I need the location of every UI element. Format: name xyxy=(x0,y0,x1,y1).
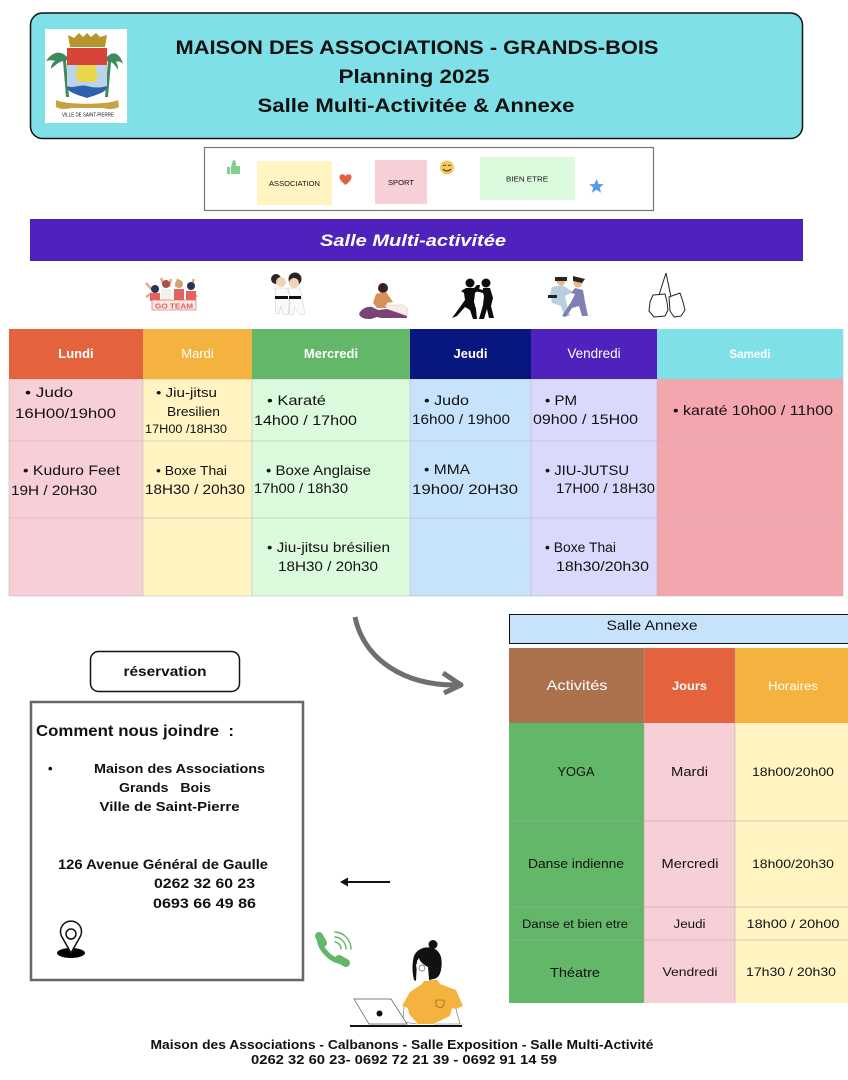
Mercredi sessions: • Jiu-jitsu brésilien xyxy=(267,540,390,555)
Mardi sessions: 18H30 / 20h30 xyxy=(145,481,245,497)
legend: association: ASSOCIATION xyxy=(269,179,320,188)
annex row: danse et bien etre: Danse et bien etre xyxy=(522,919,628,931)
icon: smiley xyxy=(440,160,454,174)
icon: green phone xyxy=(319,932,351,963)
annex row: danse indienne xyxy=(528,856,834,871)
section heading: Salle Annexe xyxy=(510,614,848,644)
Vendredi sessions: 17H00 / 18H30 xyxy=(556,481,655,496)
header: Vendredi: Vendredi xyxy=(567,346,621,361)
header: Mardi: Mardi xyxy=(181,346,214,361)
contact address: Ville de Saint-Pierre xyxy=(100,799,240,814)
annex row: yoga: YOGA xyxy=(558,765,595,779)
arrow: left to contact panel xyxy=(340,878,390,886)
Jeudi sessions: 16h00 / 19h00 xyxy=(412,412,510,427)
annex column headers: Activités xyxy=(546,677,608,693)
contact address: Grands Bois xyxy=(119,780,211,795)
Vendredi sessions: • PM xyxy=(545,393,577,408)
Mercredi sessions: • Karaté xyxy=(267,392,326,408)
woman body xyxy=(402,980,463,1024)
icon: judo pair xyxy=(271,272,305,315)
Lundi sessions: 19H / 20H30 xyxy=(11,482,97,498)
Mercredi sessions: 14h00 / 17h00 xyxy=(254,412,357,428)
Jeudi sessions: • Judo xyxy=(424,393,469,408)
legend: association xyxy=(257,161,332,205)
Samedi session: • karaté 10h00 / 11h00 xyxy=(673,402,833,418)
Mercredi sessions: • Boxe Anglaise xyxy=(266,463,371,478)
annex column headers xyxy=(509,648,848,723)
icon: boxing gloves xyxy=(649,273,685,317)
logo: coat of arms of Saint-Pierre xyxy=(45,29,127,123)
header banner xyxy=(30,13,802,138)
table column backgrounds xyxy=(9,329,843,596)
title lines xyxy=(176,37,658,117)
Mardi sessions: 17H00 /18H30 xyxy=(145,424,227,436)
Mercredi sessions xyxy=(254,392,390,574)
icon: heart xyxy=(340,174,352,185)
annex row: yoga: Mardi xyxy=(671,764,708,779)
Jeudi sessions: • MMA xyxy=(424,461,471,477)
icon: thumbs up xyxy=(227,160,240,174)
footer contact xyxy=(150,1037,654,1067)
icon: jiu-jitsu pair xyxy=(548,276,588,317)
legend: bien etre xyxy=(480,157,575,200)
annex table xyxy=(509,648,848,1003)
annex column headers: Horaires xyxy=(768,681,818,693)
legend: sport: SPORT xyxy=(388,178,414,187)
Lundi sessions: 16H00/19h00 xyxy=(15,405,116,421)
Jeudi sessions xyxy=(412,393,518,497)
annex row: yoga xyxy=(558,764,834,779)
contact address: Maison des Associations xyxy=(94,761,265,776)
reservation button xyxy=(90,652,240,692)
header: Jeudi: Jeudi xyxy=(454,346,487,361)
annex row: danse indienne: 18h00/20h30 xyxy=(752,857,834,871)
Mercredi sessions: 18H30 / 20h30 xyxy=(278,559,378,574)
illustration: woman at laptop xyxy=(350,940,463,1027)
logo caption: VILLE DE SAINT-PIERRE xyxy=(62,112,114,118)
Mardi sessions: • Boxe Thai xyxy=(156,463,227,478)
Vendredi sessions: 18h30/20h30 xyxy=(556,559,649,574)
contact address: 126 Avenue Général de Gaulle xyxy=(58,857,269,872)
activity illustrations xyxy=(146,272,685,319)
laptop xyxy=(354,999,407,1024)
header: Jeudi xyxy=(410,329,531,379)
footer contact: 0262 32 60 23- 0692 72 21 39 - 0692 91 14 59 xyxy=(251,1052,557,1067)
arrow: curved to annex xyxy=(355,617,461,693)
section heading: Salle Multi-activitée xyxy=(30,219,803,261)
title lines: Planning 2025 xyxy=(338,66,490,88)
legend box xyxy=(204,148,654,210)
icon: go team group: GO TEAM xyxy=(155,302,193,310)
annex cell backgrounds xyxy=(509,648,848,1003)
annex row: theatre: 17h30 / 20h30 xyxy=(746,965,836,979)
woman hair xyxy=(412,947,442,981)
header: Vendredi xyxy=(531,329,657,379)
icon: map pin xyxy=(57,921,85,958)
Jeudi sessions: 19h00/ 20H30 xyxy=(412,481,518,497)
Lundi sessions: • Judo xyxy=(25,384,73,400)
icon: go team group xyxy=(146,278,197,310)
weekly schedule table xyxy=(9,329,843,596)
Mardi sessions: • Jiu-jitsu xyxy=(156,385,217,400)
footer contact: Maison des Associations - Calbanons - Salle Exposition - Salle Multi-Activité xyxy=(150,1037,654,1052)
legend: bien etre: BIEN ETRE xyxy=(506,174,548,184)
annex row: danse indienne: Mercredi xyxy=(662,856,719,871)
reservation button: réservation xyxy=(124,663,206,679)
icon: boxers silhouette xyxy=(452,278,494,319)
Mercredi sessions: 17h00 / 18h30 xyxy=(254,481,348,496)
icon: star xyxy=(589,179,604,193)
contact address: 0262 32 60 23 xyxy=(154,876,256,891)
Vendredi sessions: • JIU-JUTSU xyxy=(545,463,629,478)
contact address: 0693 66 49 86 xyxy=(153,896,257,911)
annex row: danse et bien etre xyxy=(522,917,840,931)
title lines: Salle Multi-Activitée & Annexe xyxy=(258,95,575,117)
annex column headers: Jours xyxy=(672,679,707,693)
annex row: theatre: Vendredi xyxy=(662,965,718,979)
desk line xyxy=(350,1025,462,1027)
legend: sport xyxy=(375,160,427,204)
Mardi sessions xyxy=(145,385,245,497)
header: Mercredi: Mercredi xyxy=(304,346,358,361)
section heading: Salle Multi-activitée: Salle Multi-activitée xyxy=(320,231,506,250)
annex row: theatre xyxy=(550,965,836,980)
header: Lundi: Lundi xyxy=(58,346,94,361)
annex row: theatre: Théatre xyxy=(550,965,600,980)
Vendredi sessions xyxy=(533,393,655,574)
Vendredi sessions: • Boxe Thai xyxy=(545,540,616,555)
title lines: MAISON DES ASSOCIATIONS - GRANDS-BOIS xyxy=(176,37,658,59)
header: Samedi xyxy=(657,329,843,379)
annex row: danse et bien etre: 18h00 / 20h00 xyxy=(746,917,840,931)
header: Mercredi xyxy=(252,329,410,379)
header: Lundi xyxy=(9,329,143,379)
woman face xyxy=(416,960,429,981)
Lundi sessions xyxy=(11,384,120,498)
contact address: • xyxy=(48,761,53,776)
annex row: danse et bien etre: Jeudi xyxy=(674,919,706,931)
Vendredi sessions: 09h00 / 15H00 xyxy=(533,412,638,427)
annex row: yoga: 18h00/20h00 xyxy=(752,765,834,779)
section heading: Salle Annexe: Salle Annexe xyxy=(606,617,698,633)
Mardi sessions: Bresilien xyxy=(167,404,220,419)
header: Mardi xyxy=(143,329,252,379)
icon: yoga stretch xyxy=(359,283,408,319)
contact address xyxy=(48,761,269,911)
header: Samedi: Samedi xyxy=(730,349,770,361)
annex row: danse indienne: Danse indienne xyxy=(528,856,624,871)
contact heading: Comment nous joindre : xyxy=(36,723,234,740)
contact panel xyxy=(31,702,303,980)
Lundi sessions: • Kuduro Feet xyxy=(23,462,120,478)
